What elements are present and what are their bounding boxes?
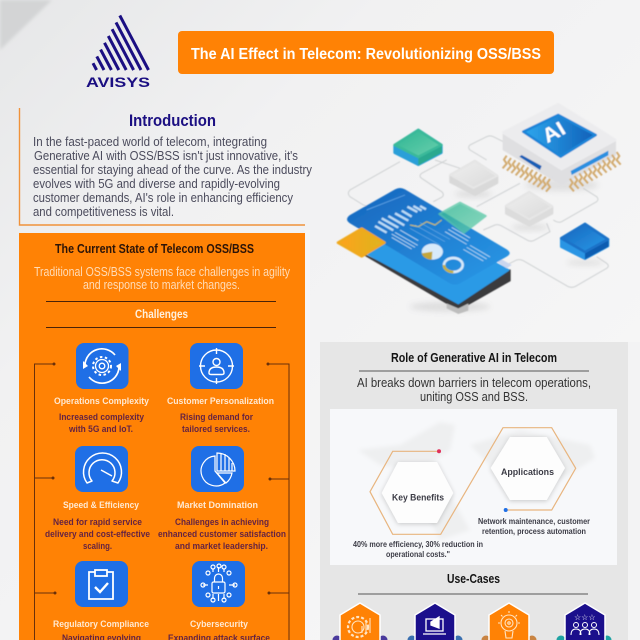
teal block (395, 130, 442, 165)
challenge: cybersecurity (168, 561, 270, 640)
challenge: market domination: and market leadership. (175, 541, 268, 552)
icon: lock circuit (192, 561, 245, 607)
applications text: Network maintenance, customer (478, 516, 591, 526)
use-case 4 badge (556, 603, 612, 640)
role description: uniting OSS and BSS. (420, 389, 528, 404)
challenge: market domination: enhanced customer satisfaction (158, 529, 286, 540)
challenge: speed and efficiency: Speed & Efficiency (63, 500, 140, 511)
applications text: retention, process automation (482, 526, 586, 536)
role description: AI breaks down barriers in telecom operations, (357, 375, 591, 390)
use-case 2 badge (408, 603, 462, 640)
challenge: speed and efficiency (45, 446, 150, 552)
intro text: evolves with 5G and diverse and rapidly-evolving (33, 177, 280, 191)
intro text: essential for staying ahead of the curve. As the industry (33, 163, 313, 177)
icon: gear with cycle arrows (76, 343, 128, 389)
benefits text: operational costs." (386, 549, 450, 559)
title banner: The AI Effect in Telecom: Revolutionizing OSS/BSS (191, 46, 541, 63)
challenge: customer personalization: tailored services. (182, 424, 250, 435)
icon: light bulb (498, 611, 520, 638)
gray block upper (451, 161, 497, 197)
intro text: Generative AI with OSS/BSS isn't just innovative, it's (34, 149, 298, 163)
challenge: regulatory compliance (53, 561, 149, 640)
challenge: customer personalization (167, 343, 274, 435)
challenge: speed and efficiency: Need for rapid service (53, 517, 142, 528)
challenge: customer personalization: Customer Personalization (167, 396, 274, 407)
challenge: cybersecurity: Cybersecurity (190, 619, 249, 630)
challenge: speed and efficiency: delivery and cost-effective (45, 529, 150, 540)
icon: speedometer (75, 446, 128, 492)
heading: current state: The Current State of Telecom OSS/BSS (55, 241, 254, 256)
icon: pie chart (191, 446, 244, 492)
illustration: AI chip and phone network (338, 105, 621, 314)
chip pins (503, 152, 621, 192)
intro sentence (34, 265, 291, 292)
challenge: speed and efficiency: scaling. (83, 541, 112, 552)
challenge: customer personalization: Rising demand for (180, 412, 253, 423)
icon: three stars over people: ☆☆☆ (574, 613, 596, 622)
hexagon outline connector (370, 428, 576, 534)
AI chip (503, 105, 621, 192)
logo: Avisys (86, 16, 150, 90)
challenge: operations complexity: with 5G and IoT. (68, 424, 133, 435)
heading: use-cases: Use-Cases (447, 571, 500, 586)
blue dot (504, 508, 508, 512)
applications text (478, 516, 591, 536)
connector lines (348, 136, 608, 287)
logo: Avisys: AVISYS (86, 74, 150, 90)
benefits text (353, 539, 483, 559)
challenge: market domination: Challenges in achieving (175, 517, 269, 528)
role description (357, 375, 591, 404)
icon: megaphone on laptop (423, 617, 446, 634)
floating teal tile (439, 203, 486, 233)
right bracket (267, 363, 289, 640)
red dot (437, 449, 441, 453)
hexagon: key benefits: Key Benefits (392, 492, 444, 504)
challenge: operations complexity: Operations Complexity (54, 396, 150, 407)
icon: person in target (190, 343, 243, 389)
intro sentence: Traditional OSS/BSS systems face challenges in agility (34, 265, 291, 279)
hexagon: applications: Applications (501, 467, 554, 478)
challenge: operations complexity: Increased complexity (59, 412, 145, 423)
heading: introduction: Introduction (129, 112, 216, 130)
challenge: market domination: Market Domination (177, 500, 258, 511)
intro text: In the fast-paced world of telecom, integrating (33, 135, 267, 149)
phone floating screen (347, 188, 510, 285)
AI chip: AI (538, 117, 570, 147)
left bracket (34, 363, 56, 640)
title banner (178, 31, 554, 74)
white card: benefits and applications (330, 409, 617, 565)
heading: role of generative AI: Role of Generative AI in Telecom (391, 350, 557, 365)
use-case 3 badge (482, 603, 536, 640)
subheading: challenges: Challenges (135, 307, 188, 321)
challenge: operations complexity (54, 343, 150, 435)
intro sentence: and response to market changes. (83, 278, 240, 292)
hexagon: key benefits (382, 462, 453, 523)
panel: current state (19, 233, 305, 640)
intro text: customer demands, AI's role in enhancing efficiency (33, 191, 294, 205)
use-case 1 badge (332, 603, 388, 640)
challenge: regulatory compliance: Regulatory Compliance (53, 619, 149, 630)
hexagon: applications (491, 437, 565, 500)
icon: gear with bars (348, 617, 370, 637)
intro text: and competitiveness is vital. (33, 205, 174, 219)
panel: role of generative AI (320, 342, 628, 640)
challenge: market domination (158, 446, 286, 552)
intro text (33, 135, 313, 219)
phone (362, 223, 512, 314)
world map backdrop (358, 422, 595, 540)
floating yellow tile (338, 229, 384, 256)
blue block (561, 224, 609, 266)
icon: clipboard check (75, 561, 128, 607)
panel: introduction (20, 108, 313, 225)
gray block lower (506, 192, 552, 230)
benefits text: 40% more efficiency, 30% reduction in (353, 539, 483, 549)
